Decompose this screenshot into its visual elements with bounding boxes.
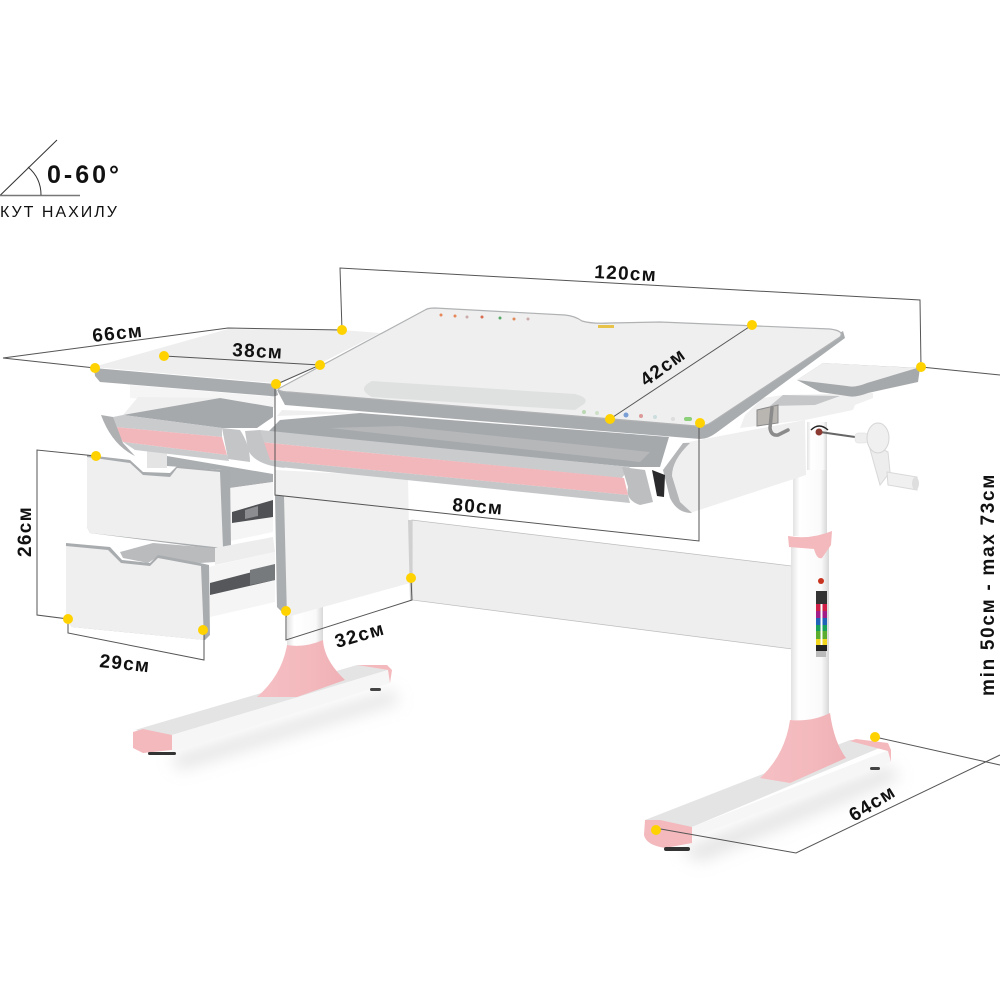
label: 26 cm: 26см	[15, 506, 36, 557]
main tilting desktop	[277, 308, 845, 439]
right pen tray	[245, 410, 669, 505]
cabinet under desk	[275, 470, 412, 617]
label: height range: min 50см - max 73см	[978, 473, 999, 696]
measurement dots	[63, 320, 926, 835]
right side shelf	[740, 363, 920, 428]
label: 42 cm: 42см	[637, 344, 690, 391]
lower drawer	[66, 537, 275, 640]
label: 80 cm: 80см	[452, 495, 504, 520]
left shelf top	[93, 329, 380, 396]
desktop print strip	[440, 314, 692, 421]
crank handle	[811, 423, 919, 490]
tilt angle caption: КУТ НАХИЛУ	[0, 204, 119, 221]
left leg	[133, 605, 392, 755]
tilt angle icon	[0, 140, 80, 196]
right leg column	[788, 422, 832, 720]
label: 120 cm: 120см	[594, 262, 658, 286]
pink flare right leg	[760, 713, 846, 783]
label: 29 cm: 29см	[98, 651, 151, 677]
wrist rest	[364, 381, 586, 410]
label: 38 cm: 38см	[232, 340, 284, 364]
right foot	[644, 739, 891, 851]
upper drawer	[87, 450, 273, 550]
floor shadows	[170, 690, 900, 862]
label: 64 cm: 64см	[846, 781, 900, 826]
label: 66 cm: 66см	[91, 321, 144, 347]
label: 32 cm: 32см	[333, 619, 387, 653]
dimension lines	[3, 268, 1000, 853]
tilt angle value: 0-60°	[47, 161, 122, 189]
hook	[757, 405, 788, 435]
left pen tray	[101, 385, 275, 462]
back beam	[412, 520, 792, 649]
side apron panel	[663, 420, 806, 513]
